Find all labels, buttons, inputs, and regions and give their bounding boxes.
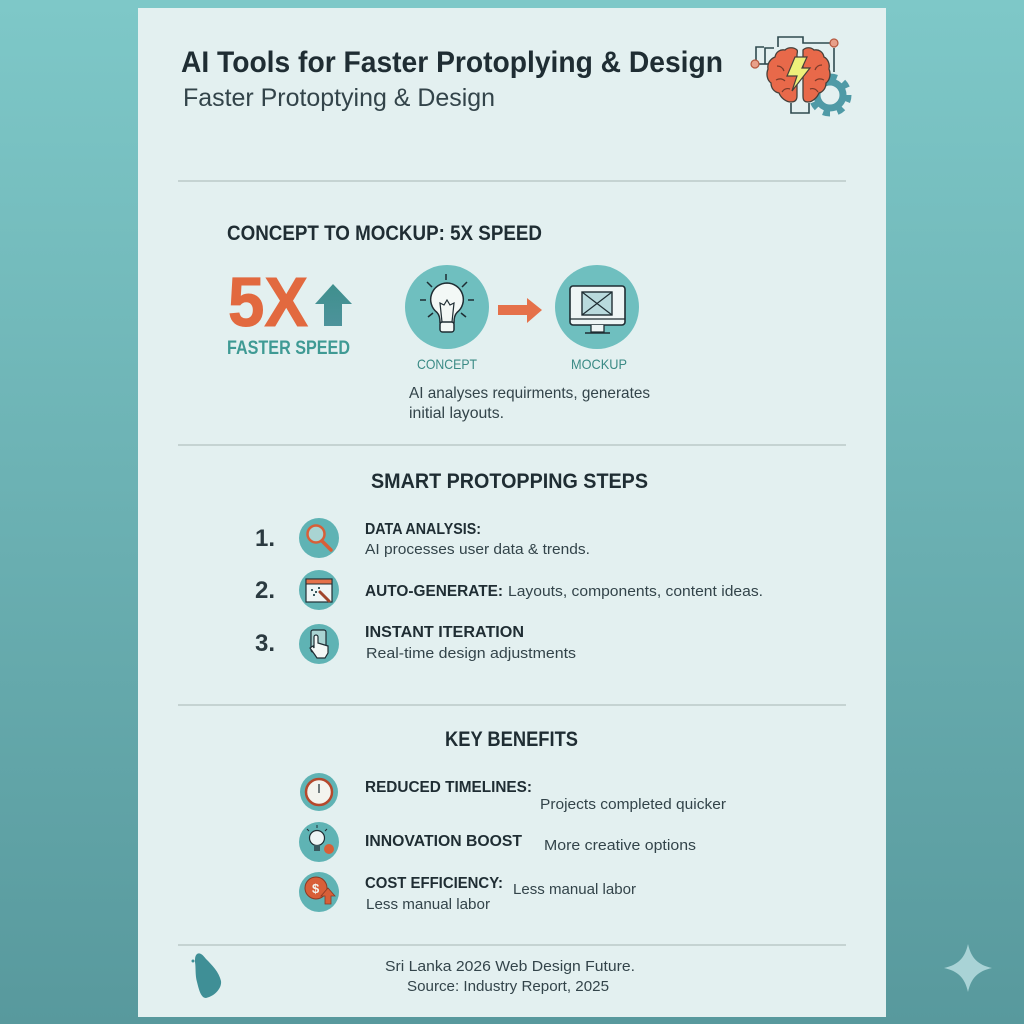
benefit: cost efficiency: Less manual labor xyxy=(513,881,636,898)
icon: bulb with gears xyxy=(299,822,339,862)
text: concept description: AI analyses requirments, generates xyxy=(409,385,650,402)
panel: main page xyxy=(138,8,886,1017)
step 2: auto-generate: Layouts, components, content ideas. xyxy=(508,583,763,600)
label: mockup: MOCKUP xyxy=(571,356,627,372)
icon: mockup monitor xyxy=(555,265,639,349)
divider xyxy=(178,704,846,706)
benefit: reduced timelines: Projects completed quicker xyxy=(540,796,726,813)
stat: 5X faster speed xyxy=(227,263,352,359)
icon: concept lightbulb xyxy=(405,265,489,349)
step 1: data analysis: 1. xyxy=(255,525,275,552)
divider xyxy=(178,444,846,446)
icon: AI brain with gear xyxy=(751,37,848,114)
step 1: data analysis: AI processes user data & trends. xyxy=(365,541,590,558)
step 2: auto-generate: 2. xyxy=(255,577,275,604)
footer text xyxy=(385,958,635,995)
benefit: reduced timelines xyxy=(300,773,726,813)
benefit: reduced timelines: REDUCED TIMELINES: xyxy=(365,779,532,796)
divider xyxy=(178,180,846,182)
icon: sparkle watermark xyxy=(944,944,992,992)
footer text: Sri Lanka 2026 Web Design Future. xyxy=(385,958,635,975)
step 2: auto-generate xyxy=(255,570,763,610)
benefit: innovation boost xyxy=(299,822,696,862)
step 3: instant iteration xyxy=(255,624,576,664)
benefit: innovation boost: INNOVATION BOOST xyxy=(365,833,522,850)
icon: dollar with arrow: $ xyxy=(312,881,320,896)
step 1: data analysis xyxy=(255,518,590,558)
stat: 5X faster speed: 5X xyxy=(228,263,308,341)
step 3: instant iteration: Real-time design adjustments xyxy=(366,645,576,662)
arrow: concept to mockup xyxy=(498,298,542,323)
footer text: Source: Industry Report, 2025 xyxy=(407,978,609,995)
icon: magnifier xyxy=(299,518,339,558)
icon: clock xyxy=(300,773,338,811)
title: AI Tools for Faster Protoplying & Design xyxy=(181,46,723,79)
icon: touch hand xyxy=(299,624,339,664)
step 2: auto-generate: AUTO-GENERATE: xyxy=(365,583,503,600)
section heading: smart prototyping steps: SMART PROTOPPING STEPS xyxy=(371,470,648,493)
step 3: instant iteration: INSTANT ITERATION xyxy=(365,624,524,641)
text: concept description xyxy=(409,385,650,422)
icon: window with cursor xyxy=(299,570,339,610)
step 3: instant iteration: 3. xyxy=(255,630,275,657)
benefit: innovation boost: More creative options xyxy=(544,837,696,854)
step 1: data analysis: DATA ANALYSIS: xyxy=(365,521,481,538)
icon: dollar with arrow xyxy=(299,872,339,912)
subtitle: Faster Protoptying & Design xyxy=(183,84,495,112)
stat: 5X faster speed: FASTER SPEED xyxy=(227,338,350,359)
divider xyxy=(178,944,846,946)
benefit: cost efficiency xyxy=(299,872,636,913)
label: concept: CONCEPT xyxy=(417,356,477,372)
icon: up arrow xyxy=(315,284,352,326)
section heading: key benefits: KEY BENEFITS xyxy=(445,728,578,751)
benefit: cost efficiency: Less manual labor xyxy=(366,896,490,913)
benefit: cost efficiency: COST EFFICIENCY: xyxy=(365,875,503,892)
section heading: concept to mockup: CONCEPT TO MOCKUP: 5X SPEED xyxy=(227,222,542,245)
icon: Sri Lanka map xyxy=(192,953,221,998)
text: concept description: initial layouts. xyxy=(409,405,504,422)
